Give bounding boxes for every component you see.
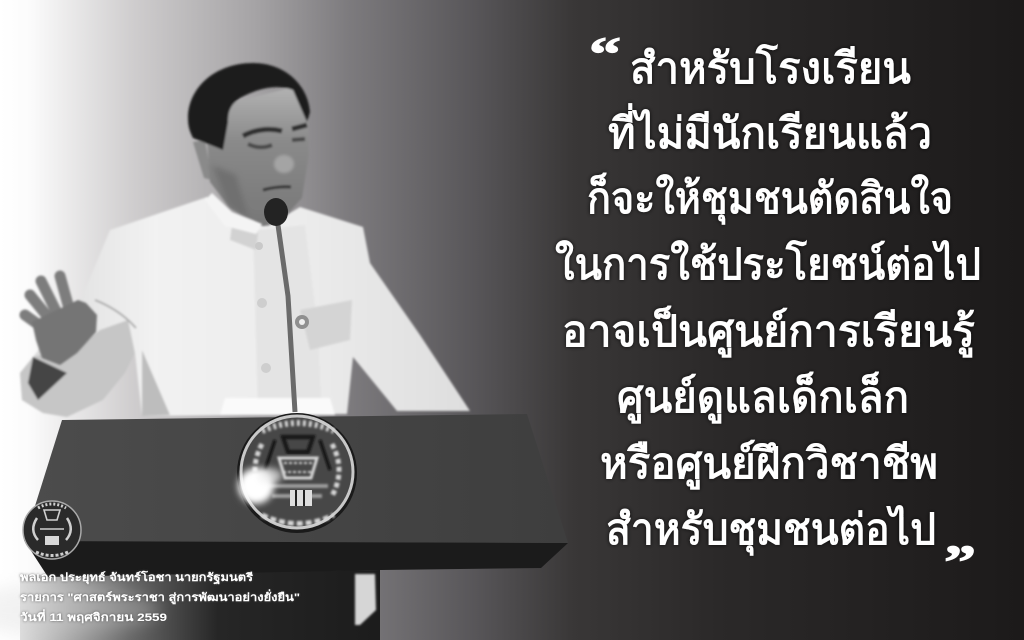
logo: government seal — [23, 501, 81, 559]
microphone — [264, 198, 295, 412]
quote line 8: สำหรับชุมชนต่อไป — [606, 505, 936, 556]
opening quote mark: “ — [589, 28, 621, 81]
collar — [205, 193, 262, 234]
podium seal emblem — [237, 413, 357, 533]
quote line 4: ในการใช้ประโยชน์ต่อไป — [555, 240, 981, 289]
head and face — [188, 63, 310, 226]
fade behind caption — [0, 586, 160, 634]
torso shading — [142, 350, 170, 416]
raised hand — [25, 276, 97, 365]
jacket buttons and pin — [255, 242, 309, 373]
quote line 3: ก็จะให้ชุมชนตัดสินใจ — [587, 173, 953, 225]
caption — [20, 570, 300, 624]
caption line: programme: รายการ "ศาสตร์พระราชา สู่การพัฒนาอย่างยั่งยืน" — [20, 589, 300, 605]
caption line: date: วันที่ 11 พฤศจิกายน 2559 — [20, 609, 167, 624]
quote line 6: ศูนย์ดูแลเด็กเล็ก — [617, 372, 909, 424]
photo: speaker at podium — [0, 63, 568, 640]
quote line 2: ที่ไม่มีนักเรียนแล้ว — [608, 104, 932, 158]
closing quote mark: ” — [944, 536, 976, 589]
quotation — [555, 28, 981, 589]
podium — [20, 414, 568, 640]
body in white jacket — [20, 197, 470, 417]
quote line 1: สำหรับโรงเรียน — [630, 44, 911, 93]
quote line 7: หรือศูนย์ฝึกวิชาชีพ — [600, 440, 938, 490]
caption line: name: พลเอก ประยุทธ์ จันทร์โอชา นายกรัฐมนตรี — [20, 570, 253, 585]
sleeve shading — [20, 320, 135, 417]
quote line 5: อาจเป็นศูนย์การเรียนรู้ — [562, 306, 975, 358]
